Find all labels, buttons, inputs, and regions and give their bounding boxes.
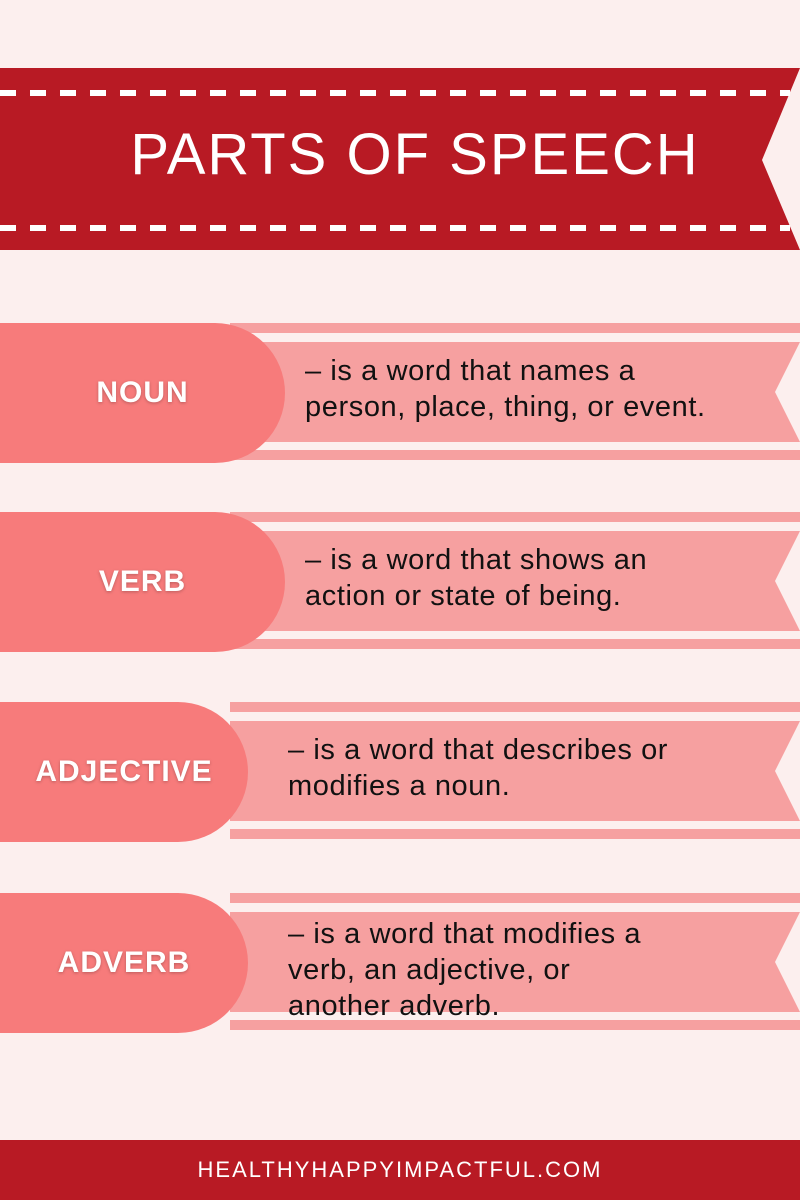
- row: adjective: [0, 702, 800, 842]
- footer: HEALTHYHAPPYIMPACTFUL.COM: [198, 1157, 602, 1182]
- definition: adjective: – is a word that describes or: [288, 734, 668, 766]
- row: noun: [0, 323, 800, 463]
- tab: adverb: [0, 893, 248, 1033]
- definition: verb: – is a word that shows an: [305, 544, 647, 576]
- tab: noun: NOUN: [96, 376, 189, 409]
- row: verb: [0, 512, 800, 652]
- row: adverb: [0, 893, 800, 1033]
- tab: adjective: ADJECTIVE: [35, 755, 213, 788]
- definition: adjective: modifies a noun.: [288, 770, 510, 802]
- definition: adverb: – is a word that modifies a: [288, 918, 641, 950]
- definition: adjective: [288, 734, 668, 802]
- definition: verb: [305, 544, 647, 612]
- tab: verb: VERB: [99, 565, 186, 598]
- tab: noun: [0, 323, 285, 463]
- definition: noun: [305, 355, 706, 423]
- definition: noun: person, place, thing, or event.: [305, 391, 706, 423]
- definition: verb: action or state of being.: [305, 580, 621, 612]
- title banner: [0, 68, 800, 250]
- definition: noun: – is a word that names a: [305, 355, 635, 387]
- footer: [0, 1140, 800, 1200]
- definition: adverb: another adverb.: [288, 990, 500, 1022]
- tab: verb: [0, 512, 285, 652]
- tab: adverb: ADVERB: [58, 946, 190, 979]
- title text: PARTS OF SPEECH: [130, 122, 700, 187]
- definition: adverb: [288, 918, 641, 1022]
- tab: adjective: [0, 702, 248, 842]
- definition: adverb: verb, an adjective, or: [288, 954, 570, 986]
